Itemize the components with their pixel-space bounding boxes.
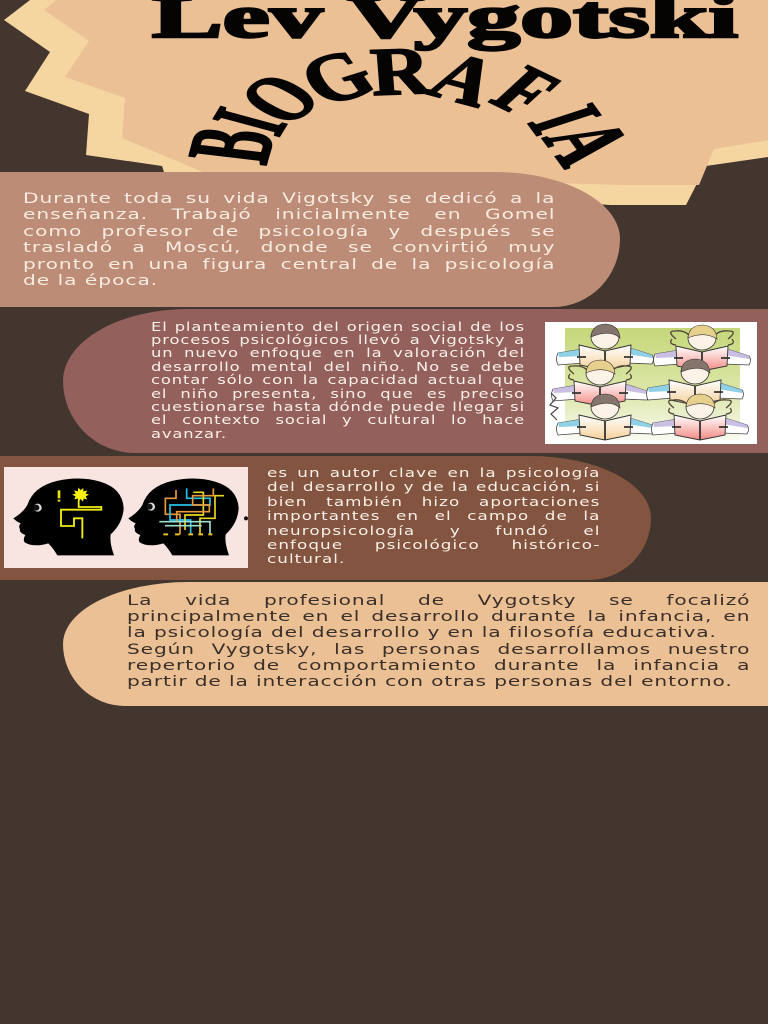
text: professional life paragraph: partir de la interacción con otras personas del entorno.: [127, 674, 733, 690]
text: key author paragraph: bien también hizo aportaciones: [267, 494, 600, 509]
background star shape: [4, 0, 768, 205]
text: teaching paragraph: de la época.: [23, 272, 158, 288]
heading: biografia arc: [163, 33, 654, 177]
text: social origin paragraph: contar sólo con la capacidad actual que: [151, 373, 525, 387]
heading: biografia arc: G: [284, 34, 390, 121]
text: professional life paragraph: la psicología del desarrollo y en la filosofía educativa.: [127, 624, 717, 640]
text: social origin paragraph: El planteamiento del origen social de los: [151, 320, 525, 334]
text: teaching paragraph: trasladó a Moscú, donde se convirtió muy: [23, 240, 556, 256]
text: social origin paragraph: el contexto social y cultural lo hace: [151, 413, 525, 427]
text: social origin paragraph: el niño presenta, sino que es preciso: [151, 387, 525, 401]
text: professional life paragraph: Según Vygotsky, las personas desarrollamos nuestro: [127, 642, 750, 658]
text: social origin paragraph: [151, 320, 525, 441]
image: children reading: [545, 322, 757, 444]
text: professional life paragraph: [127, 592, 750, 690]
panel: key author: [0, 456, 651, 580]
text: professional life paragraph: repertorio de comportamiento durante la infancia a: [127, 658, 750, 674]
heading: biografia arc: O: [218, 60, 342, 137]
heading: biografia arc: I: [191, 99, 310, 144]
icon: head with simple path: [13, 478, 124, 555]
text: key author paragraph: es un autor clave en la psicología: [267, 465, 600, 480]
heading: biografia arc: I: [505, 95, 622, 144]
text: teaching paragraph: pronto en una figura central de la psicología: [23, 256, 556, 272]
text: professional life paragraph: principalmente en el desarrollo durante la infancia, en: [127, 608, 750, 624]
text: teaching paragraph: como profesor de psicología y después se: [23, 224, 556, 240]
text: social origin paragraph: procesos psicológicos llevó a Vigotsky a: [151, 333, 525, 347]
text: key author paragraph: importantes en el campo de la: [267, 508, 600, 523]
heading: biografia arc: F: [474, 53, 576, 131]
heading: biografia arc: B: [163, 122, 300, 169]
title: [152, 0, 738, 170]
panel: social origin: [63, 309, 768, 453]
text: key author paragraph: [267, 465, 600, 566]
text: teaching paragraph: Durante toda su vida Vigotsky se dedicó a la: [23, 190, 556, 206]
text: social origin paragraph: avanzar.: [151, 427, 227, 441]
image: two heads: [4, 467, 248, 568]
text: teaching paragraph: [23, 190, 556, 288]
text: teaching paragraph: enseñanza. Trabajó inicialmente en Gomel: [23, 206, 556, 222]
icon: head with complex paths: [128, 478, 239, 555]
panel: professional life: [63, 582, 768, 706]
panel: teaching: [0, 172, 620, 307]
text: key author paragraph: enfoque psicológico histórico-: [267, 537, 600, 552]
text: key author paragraph: neuropsicología y fundó el: [267, 523, 600, 538]
signature: [550, 393, 558, 420]
text: key author paragraph: cultural.: [267, 551, 345, 566]
text: social origin paragraph: cuestionarse hasta dónde puede llegar si: [151, 400, 525, 414]
heading: biografia arc: A: [415, 38, 512, 122]
text: social origin paragraph: desarrollo mental del niño. No se debe: [151, 360, 525, 374]
text: key author paragraph: del desarrollo y de la educación, si: [267, 479, 600, 494]
text: professional life paragraph: La vida profesional de Vygotsky se focalizó: [127, 592, 750, 608]
heading: biografia arc: R: [368, 33, 434, 110]
text: social origin paragraph: un nuevo enfoque en la valoración del: [151, 346, 525, 360]
